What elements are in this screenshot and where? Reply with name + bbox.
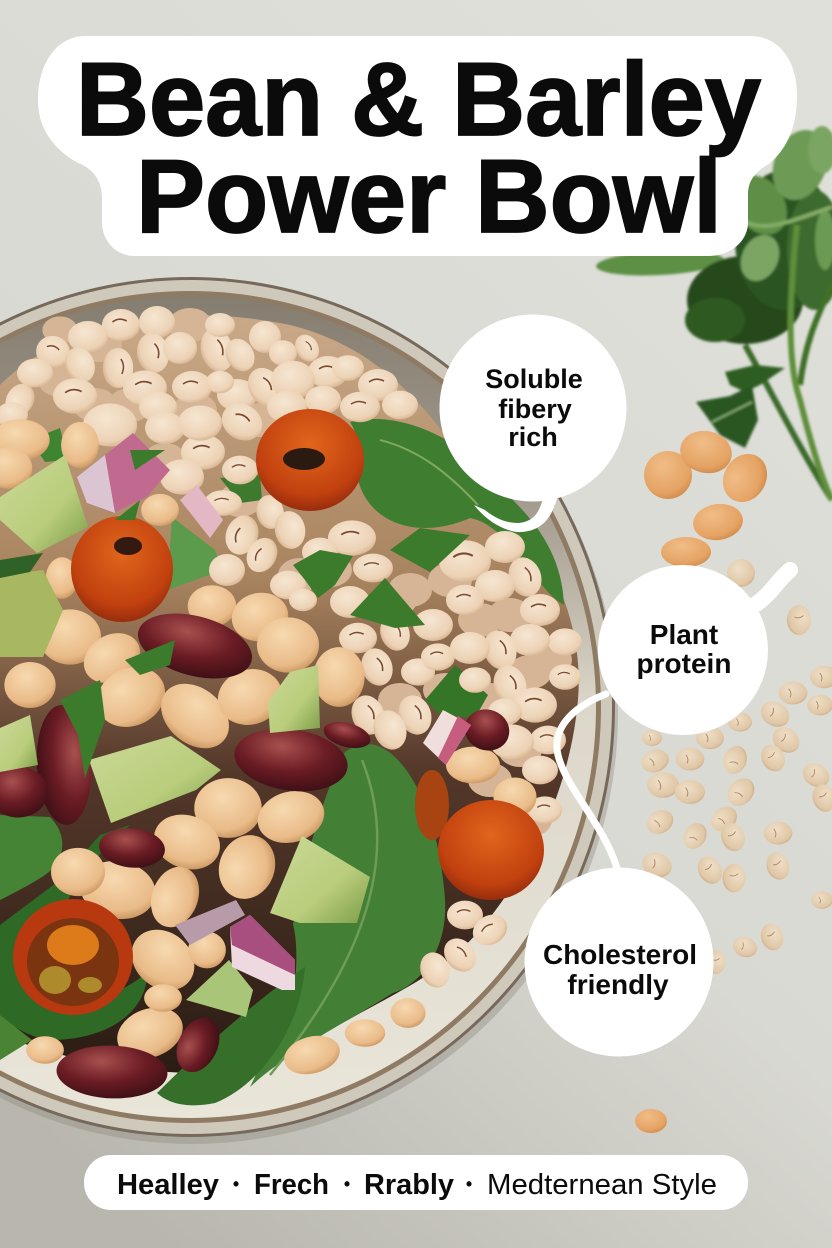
bubble: soluble fibery rich: fibery <box>498 394 572 424</box>
footer tagline pill: Healley <box>117 1169 219 1201</box>
title text: Power Bowl <box>136 139 722 255</box>
connector: plant protein tail <box>756 570 790 604</box>
title text <box>76 42 761 255</box>
bubble: cholesterol friendly: friendly <box>567 969 669 1000</box>
scattered barley grains <box>635 605 832 1133</box>
cucumber pieces <box>0 455 370 1017</box>
bubble: cholesterol friendly <box>524 868 714 1056</box>
footer tagline pill: Medternean Style <box>487 1169 717 1201</box>
title banner <box>38 36 797 256</box>
footer tagline pill: • <box>344 1174 350 1194</box>
bubble: plant protein: Plant <box>650 619 718 650</box>
bubble: soluble fibery rich: Soluble <box>485 364 583 394</box>
bowl food base <box>0 315 579 1073</box>
footer tagline pill: Rrably <box>364 1169 454 1201</box>
spinach leaves <box>0 419 564 1105</box>
footer tagline pill: • <box>466 1174 472 1194</box>
connector: soluble fibery bubble tail <box>474 496 558 532</box>
connector: plant protein to cholesterol <box>557 694 620 880</box>
red onion pieces <box>77 433 471 990</box>
bubble: plant protein: protein <box>637 648 731 679</box>
white beans <box>0 306 582 992</box>
chickpeas <box>0 419 537 1080</box>
parsley sprig <box>595 122 832 500</box>
tomatoes <box>13 409 544 1015</box>
footer tagline pill: Frech <box>254 1169 329 1201</box>
bubble: soluble fibery rich: rich <box>508 422 558 452</box>
bubble: cholesterol friendly: Cholesterol <box>543 939 697 970</box>
footer tagline pill: • <box>233 1174 239 1194</box>
kidney beans <box>0 602 515 1100</box>
bowl <box>0 277 618 1144</box>
title text: Bean & Barley <box>76 42 761 158</box>
connector lines <box>474 496 790 880</box>
bubble: soluble fibery rich <box>440 314 626 502</box>
footer tagline pill <box>84 1155 748 1210</box>
filler beans under layer <box>38 308 572 837</box>
bubble: plant protein <box>598 565 768 735</box>
scattered orange beans <box>644 426 776 587</box>
herb flecks <box>60 450 470 778</box>
